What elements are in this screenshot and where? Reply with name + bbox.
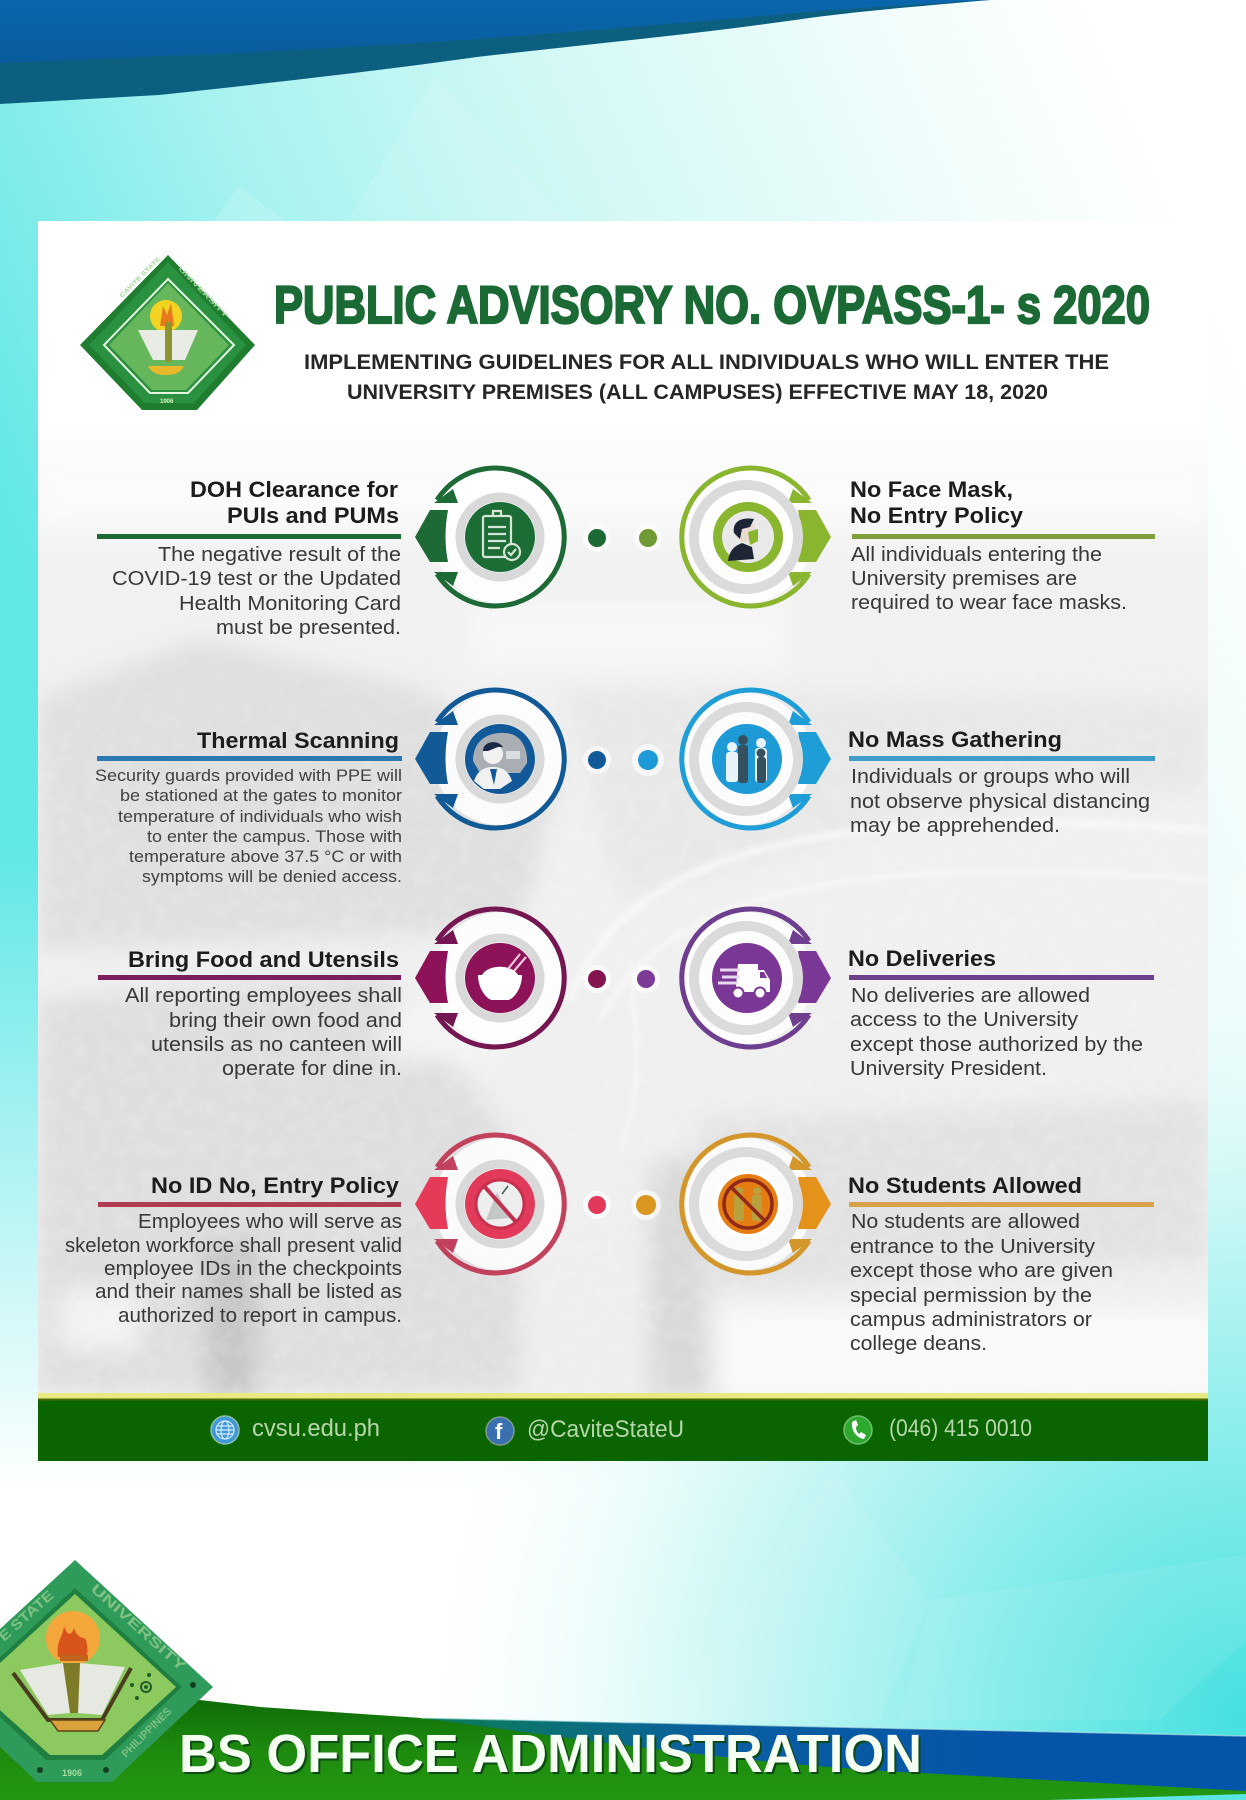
connector dots: row 4 <box>583 1190 661 1220</box>
panel: No Deliveries text: No Deliveries <box>848 946 996 971</box>
panel: No Students Allowed text: No students are allowed <box>851 1211 1080 1233</box>
banner title: BS OFFICE ADMINISTRATION <box>181 1726 924 1786</box>
panel: No Mass Gathering text: Individuals or groups who will <box>851 766 1130 788</box>
panel: No ID text: and their names shall be listed as <box>95 1281 402 1303</box>
icon: delivery truck ring <box>680 909 831 1047</box>
panel: No Face Mask text: University premises are <box>851 568 1077 590</box>
subtitle <box>304 351 1109 404</box>
panel: No Deliveries text: No deliveries are allowed <box>851 985 1090 1007</box>
logo: bottom university seal: UNIVERSITY <box>88 1580 190 1675</box>
panel: DOH clearance text: PUIs and PUMs <box>227 503 399 528</box>
icon: phone <box>844 1416 872 1444</box>
panel: No Face Mask text: No Entry Policy <box>850 503 1024 528</box>
phone number: (046) 415 0010 <box>889 1415 1032 1442</box>
panel: Thermal Scanning text: symptoms will be denied access. <box>142 867 402 886</box>
footer bar <box>38 1393 1208 1461</box>
panel: No Deliveries text: access to the University <box>850 1009 1078 1031</box>
icon: food bowl ring <box>415 909 566 1047</box>
connector dots: row 2 <box>583 744 664 776</box>
panel: No Students Allowed text: entrance to the University <box>850 1236 1095 1258</box>
panel: Thermal Scanning text: Security guards provided with PPE will <box>95 766 402 785</box>
panel: DOH clearance text: must be presented. <box>216 617 401 639</box>
panel: No Students Allowed text: except those who are given <box>850 1260 1113 1282</box>
panel: Bring Food and Utensils text <box>98 947 402 1080</box>
panel: Bring Food and Utensils text: bring their own food and <box>169 1010 402 1032</box>
panel: No ID text: No ID No, Entry Policy <box>151 1173 400 1198</box>
panel: No Face Mask text: No Face Mask, <box>850 477 1013 502</box>
logo: bottom university seal: 1906 <box>62 1768 82 1778</box>
panel: No Students Allowed text <box>848 1173 1154 1355</box>
logo: bottom university seal <box>0 1560 213 1782</box>
banner title: BS OFFICE ADMINISTRATION <box>179 1724 922 1784</box>
panel: No Students Allowed text: college deans. <box>850 1333 987 1355</box>
icon: thermal scanning ring <box>415 690 566 828</box>
panel: advisory card background photo <box>38 221 1220 1400</box>
panel: Bring Food and Utensils text: All reporting employees shall <box>125 985 402 1007</box>
panel: DOH clearance text: Health Monitoring Card <box>179 593 401 615</box>
panel: Thermal Scanning text: temperature above 37.5 °C or with <box>129 847 402 866</box>
panel: No Mass Gathering text: not observe physical distancing <box>850 791 1150 813</box>
panel: No Face Mask text: All individuals entering the <box>851 544 1102 566</box>
panel: No ID text: employee IDs in the checkpoints <box>104 1258 402 1280</box>
panel: No ID text: skeleton workforce shall present valid <box>65 1235 402 1257</box>
panel: No Mass Gathering text: No Mass Gathering <box>848 727 1062 752</box>
logo: university seal: UNIVERSITY <box>177 266 228 319</box>
panel: DOH clearance text <box>97 477 401 639</box>
panel: Bring Food and Utensils text: operate for dine in. <box>222 1058 402 1080</box>
connector dots: row 1 <box>583 524 662 552</box>
website: cvsu.edu.ph <box>252 1415 380 1442</box>
panel: Thermal Scanning text: temperature of individuals who wish <box>118 807 402 826</box>
panel: No Mass Gathering text <box>848 727 1155 837</box>
panel: No Deliveries text: except those authorized by the <box>850 1034 1143 1056</box>
panel: No Students Allowed text: special permission by the <box>850 1285 1092 1307</box>
logo: bottom university seal: PHILIPPINES <box>120 1706 174 1760</box>
top banner swoosh <box>0 0 990 104</box>
panel: No Students Allowed text: No Students Allowed <box>848 1173 1082 1198</box>
connector dots: row 3 <box>583 965 660 993</box>
panel: No Students Allowed text: campus administrators or <box>850 1309 1092 1331</box>
icon: facebook <box>486 1417 514 1445</box>
panel: Bring Food and Utensils text: Bring Food and Utensils <box>128 947 399 972</box>
icon: clipboard ring <box>415 468 566 606</box>
logo: university seal: 1906 <box>160 399 174 405</box>
icon: no ID ring <box>415 1135 566 1273</box>
icon: facebook: f <box>495 1419 503 1444</box>
subtitle: UNIVERSITY PREMISES (ALL CAMPUSES) EFFECTIVE MAY 18, 2020 <box>347 381 1048 404</box>
panel: No Face Mask text: required to wear face masks. <box>851 592 1127 614</box>
panel: Thermal Scanning text <box>95 728 402 886</box>
panel: DOH clearance text: DOH Clearance for <box>190 477 398 502</box>
icon: mass gathering ring <box>680 690 831 828</box>
icon: no students ring <box>680 1135 831 1273</box>
panel: No Face Mask text <box>850 477 1155 614</box>
panel: DOH clearance text: COVID-19 test or the Updated <box>112 568 401 590</box>
panel: No Deliveries text <box>848 946 1154 1080</box>
logo: university seal: CAVITE STATE <box>119 256 162 299</box>
panel: Thermal Scanning text: Thermal Scanning <box>197 728 399 753</box>
panel: DOH clearance text: The negative result of the <box>158 544 401 566</box>
panel: No Mass Gathering text: may be apprehended. <box>850 815 1060 837</box>
panel: Thermal Scanning text: be stationed at the gates to monitor <box>120 786 402 805</box>
logo: university seal <box>80 255 255 410</box>
subtitle: IMPLEMENTING GUIDELINES FOR ALL INDIVIDUALS WHO WILL ENTER THE <box>304 351 1109 374</box>
panel: Thermal Scanning text: to enter the campus. Those with <box>147 827 402 846</box>
panel: Bring Food and Utensils text: utensils as no canteen will <box>151 1034 402 1056</box>
icon: globe <box>211 1416 239 1444</box>
panel: No ID text <box>65 1173 402 1327</box>
facebook handle: @CaviteStateU <box>527 1416 684 1443</box>
panel: No ID text: authorized to report in campus. <box>118 1305 402 1327</box>
panel: No Deliveries text: University President. <box>850 1058 1047 1080</box>
panel: No ID text: Employees who will serve as <box>138 1211 402 1233</box>
bottom banner <box>0 1700 1246 1800</box>
icon: face mask ring <box>680 468 831 606</box>
